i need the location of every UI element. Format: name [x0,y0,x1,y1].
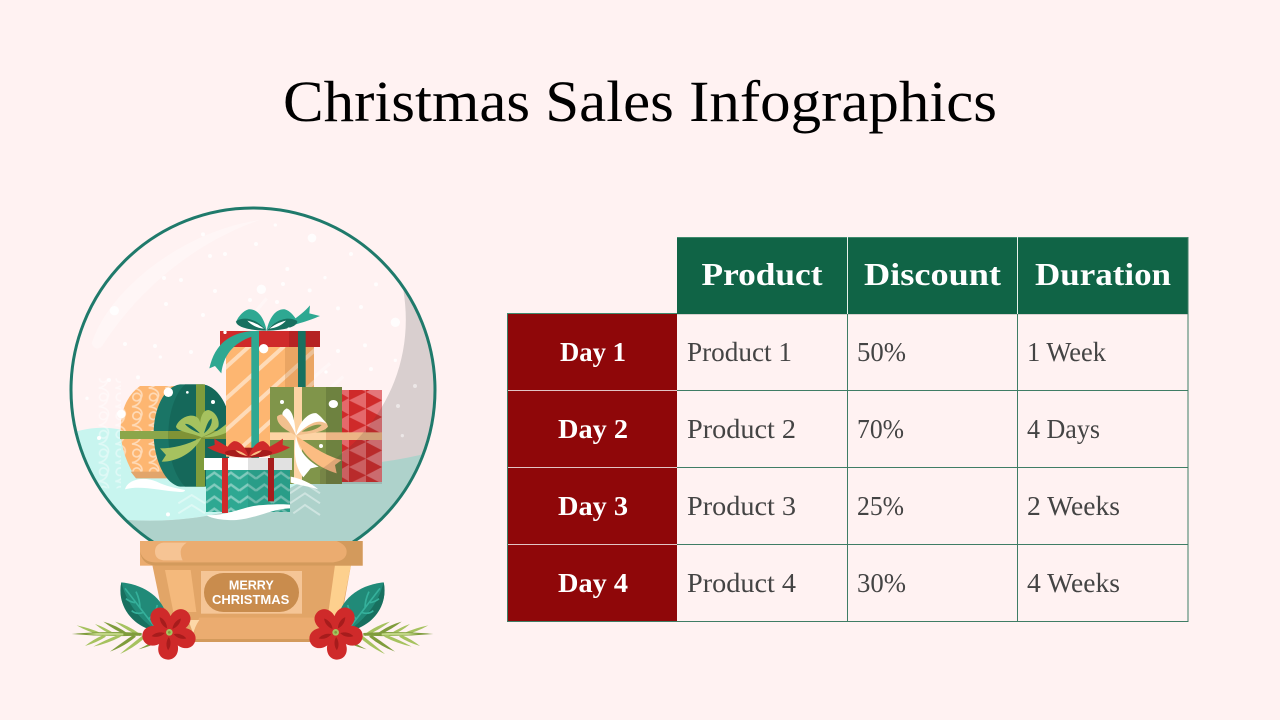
green bow [160,410,248,462]
teal bow [267,305,320,331]
day column: Day 4 [558,568,628,598]
row: day 4: 4 Weeks [1027,568,1120,598]
base rim [140,541,363,566]
illustration: snow globe [70,207,440,661]
snow mound [77,428,297,521]
right foliage [306,582,433,661]
day column: Day 3 [558,491,628,521]
gift: teal chevron box [204,439,292,513]
snowflakes [85,223,417,516]
row: day 1: Product 1 [687,337,792,367]
gift: red triangle box [342,390,382,482]
faint wrapping echoes [178,485,320,516]
row: day 3: 25% [857,491,904,521]
row: day 4: 30% [857,568,906,598]
row: day 1: 1 Week [1027,337,1106,367]
day column [507,314,677,622]
glass shadow crescent [128,290,434,541]
sales table [507,237,1188,622]
row: day 2: Product 2 [687,414,796,444]
day column: Day 1 [560,337,626,367]
gift: olive box [270,387,382,484]
row: day 1 [687,337,1106,367]
table header [677,237,1188,314]
globe outline [71,208,435,572]
base body [152,565,351,642]
red bow [207,439,249,457]
row: day 2 [687,414,1100,444]
glass shadow over gifts [320,407,382,484]
table header: Discount [864,256,1001,292]
table header: Duration [1035,256,1171,292]
title: Christmas Sales Infographics [283,69,997,134]
gift: tall orange box [209,305,320,461]
base lower band [193,618,327,642]
base [72,541,433,661]
table header: Product [702,256,823,292]
gift: orange cylinder [120,384,230,487]
cream bow [277,414,296,436]
row: day 4: Product 4 [687,568,797,598]
day column: Day 2 [558,414,628,444]
row: day 4 [687,568,1120,598]
label plate: MERRY [229,577,274,592]
snow drifts [125,477,318,520]
row: day 1: 50% [857,337,906,367]
row: day 3: Product 3 [687,491,796,521]
globe glass and gifts [70,207,440,583]
glass shine [92,220,260,349]
label plate: CHRISTMAS [212,592,290,607]
row: day 2: 70% [857,414,904,444]
row: day 2: 4 Days [1027,414,1100,444]
left foliage [72,582,199,661]
row: day 3: 2 Weeks [1027,491,1120,521]
label plate [201,571,302,614]
row: day 3 [687,491,1120,521]
